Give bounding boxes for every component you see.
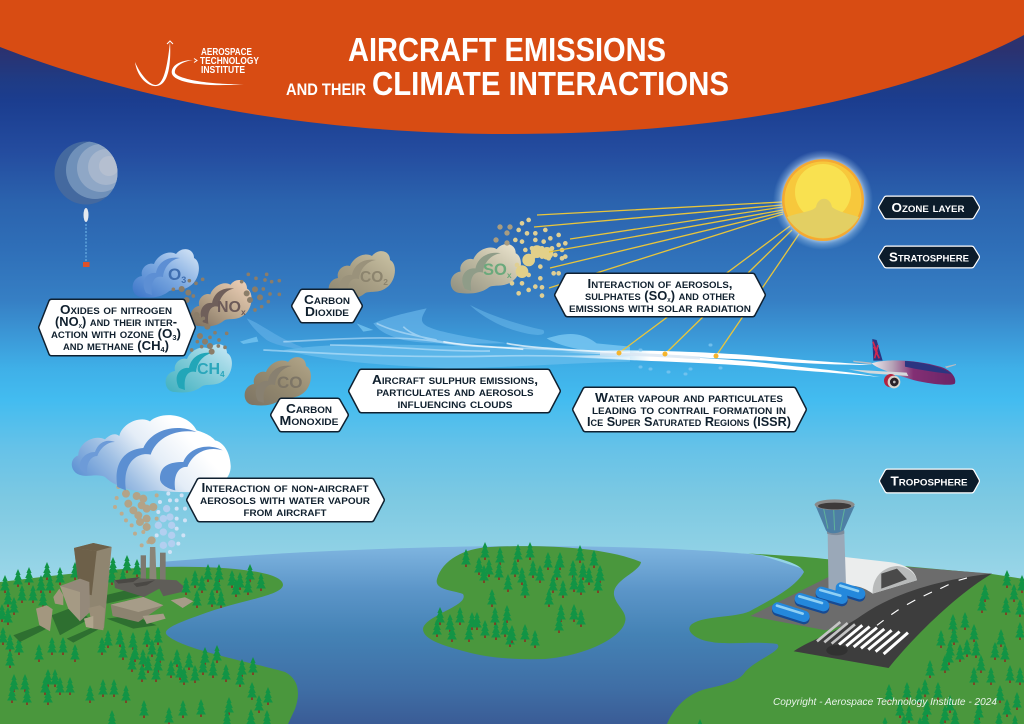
runway [794, 574, 992, 668]
header banner [0, 0, 1024, 134]
label: aircraft sulphur emissions [352, 372, 558, 411]
label: solar radiation interaction: sulphates (SO [585, 289, 665, 303]
cloud: nitrogen oxides NOx: NO [217, 299, 241, 316]
label: carbon monoxide: Monoxide [280, 414, 338, 428]
tall block [74, 543, 112, 629]
label: aircraft sulphur emissions: Aircraft sulphur emissions, [372, 373, 538, 387]
label: aircraft sulphur emissions: particulates and aerosols [376, 385, 534, 399]
label: carbon dioxide [294, 292, 360, 320]
trees: central island [432, 542, 605, 648]
cloud: nitrogen oxides NOx [191, 280, 252, 327]
cloud: ozone O3 [133, 249, 199, 297]
label: ozone layer [882, 199, 976, 216]
copyright: Copyright - Aerospace Technology Institute - 2024 [773, 696, 997, 708]
label: non-aircraft aerosols: from aircraft [244, 505, 327, 519]
label: carbon dioxide: Dioxide [305, 305, 349, 319]
cloud: methane CH4: 4 [220, 370, 225, 379]
NOx particles [173, 274, 279, 352]
solar rays [534, 202, 799, 356]
label: non-aircraft aerosols [190, 481, 382, 519]
label: solar radiation interaction: emissions with solar radiation [569, 301, 751, 315]
cloud: carbon dioxide CO2: 2 [383, 277, 388, 287]
cloud: carbon dioxide CO2: CO [360, 269, 383, 286]
label: oxides of nitrogen: action with ozone (O [51, 327, 165, 341]
turbine hall [114, 578, 183, 597]
label: water vapour and contrails: leading to contrail formation in [592, 403, 786, 417]
logo: INSTITUTE [201, 65, 245, 76]
hangar [845, 557, 917, 594]
title: AIRCRAFT EMISSIONS [348, 32, 666, 69]
cloud: methane CH4: CH [197, 361, 220, 378]
logo [135, 41, 259, 86]
cloud: carbon dioxide CO2 [329, 251, 395, 299]
apron [750, 562, 992, 630]
cloud: sulphur oxides SOx [451, 244, 521, 293]
label: water vapour and contrails: Ice Super Saturated Regions (ISSR) [587, 415, 791, 429]
cloud: sulphur oxides SOx: x [507, 270, 512, 280]
label: oxides of nitrogen: x [79, 323, 83, 330]
gas clouds [133, 244, 521, 405]
label: oxides of nitrogen [42, 302, 192, 354]
label: water vapour and contrails [576, 390, 804, 429]
label: solar radiation interaction [558, 276, 762, 315]
label: solar radiation interaction: x [667, 297, 671, 304]
label: oxides of nitrogen: ) and their inter- [82, 315, 177, 329]
threshold stripes [839, 625, 908, 654]
cloud: ozone O3: 3 [181, 275, 186, 285]
title [286, 32, 729, 102]
sun [773, 150, 873, 250]
label: oxides of nitrogen: 4 [161, 347, 165, 354]
contrail cirrus swirl [240, 305, 630, 368]
label: troposphere: Troposphere [890, 474, 968, 488]
power station and buildings [13, 543, 193, 643]
sea [150, 546, 900, 724]
small blocks [36, 605, 53, 631]
land: right shore with airfield [667, 553, 1024, 724]
cloud: sulphur oxides SOx: SO [483, 261, 507, 279]
land: left shore [0, 567, 298, 724]
airport [750, 499, 992, 668]
label: carbon monoxide [274, 401, 346, 429]
centreline dashes [877, 578, 967, 625]
plume over factory [115, 487, 185, 552]
label: carbon monoxide: Carbon [286, 402, 332, 416]
tank shadows and tanks [777, 586, 860, 619]
logo: TECHNOLOGY [200, 56, 259, 67]
label: stratosphere: Stratosphere [889, 250, 969, 264]
cloud over factory [72, 415, 231, 492]
label: stratosphere [882, 249, 976, 265]
aerosol particles near SOx [496, 220, 565, 296]
control tower [828, 532, 846, 595]
cloud: nitrogen oxides NOx: x [241, 307, 246, 317]
label: oxides of nitrogen: 3 [172, 335, 177, 342]
contrails [555, 345, 880, 377]
label: troposphere [882, 472, 976, 490]
trees: left shore [0, 555, 273, 724]
label: non-aircraft aerosols: Interaction of non-aircraft [202, 481, 369, 495]
label: carbon dioxide: Carbon [304, 293, 350, 307]
label: oxides of nitrogen: ) [177, 327, 181, 341]
label: solar radiation interaction: Interaction of aerosols, [588, 277, 732, 291]
label: solar radiation interaction: ) and other [671, 289, 736, 303]
label: non-aircraft aerosols: aerosols with water vapour [200, 493, 371, 507]
chimneys [141, 555, 146, 580]
flat roofed hall [111, 597, 163, 622]
label: aircraft sulphur emissions: influencing clouds [398, 397, 512, 411]
cloud: methane CH4 [166, 344, 232, 392]
title: AND THEIR [286, 80, 366, 99]
cloud: ozone O3: O [168, 265, 181, 284]
cloud: carbon monoxide CO: CO [277, 373, 302, 392]
weather balloon [54, 142, 118, 267]
trees: right shore [695, 570, 1024, 724]
label: water vapour and contrails: Water vapour and particulates [595, 391, 783, 405]
mid block [60, 579, 90, 621]
label: oxides of nitrogen: Oxides of nitrogen [60, 303, 172, 317]
label: ozone layer: Ozone layer [892, 201, 965, 215]
title: CLIMATE INTERACTIONS [372, 65, 729, 102]
label: oxides of nitrogen: (NO [55, 315, 78, 329]
contrail points where solar rays meet [616, 350, 718, 358]
cloud: carbon monoxide CO [245, 357, 311, 405]
label: oxides of nitrogen: and methane (CH [63, 339, 156, 353]
aircraft [848, 339, 956, 388]
logo: AEROSPACE [201, 47, 252, 58]
land: central island [423, 546, 641, 659]
label: oxides of nitrogen: ) [165, 339, 169, 353]
